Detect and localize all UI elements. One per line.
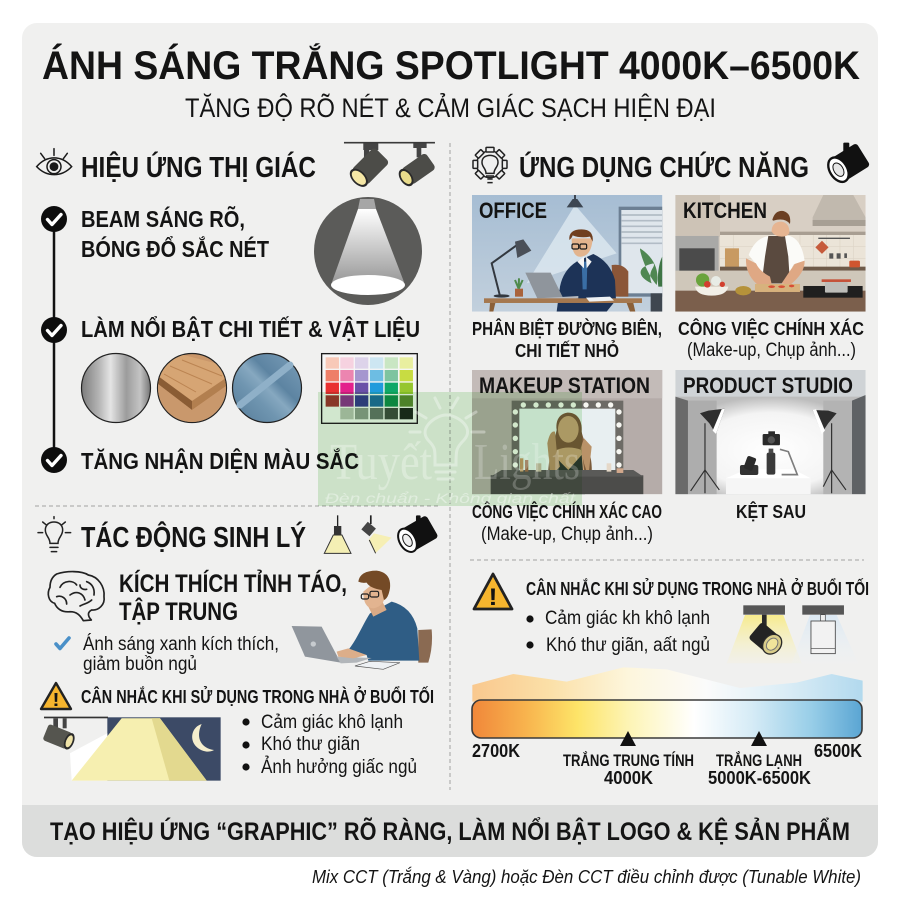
text: beam sáng rõ: BEAM SÁNG RÕ, — [81, 205, 245, 232]
material: wood — [158, 354, 226, 424]
title: ÁNH SÁNG TRẮNG SPOTLIGHT 4000K–6500K — [42, 42, 860, 88]
image: makeup station — [472, 370, 662, 494]
caption: kitchen — [678, 318, 864, 361]
warning mark right: ! — [488, 584, 498, 611]
decorative wave — [472, 667, 863, 702]
label: product studio: PRODUCT STUDIO — [683, 373, 853, 398]
panel: hiệu ứng thị giác — [37, 143, 436, 474]
color temperature bar — [472, 700, 862, 738]
illustration: person at laptop — [292, 571, 432, 669]
check 3 — [41, 447, 67, 473]
text: kích thích tỉnh táo: KÍCH THÍCH TỈNH TÁO, — [119, 568, 347, 598]
caption: kitchen: CÔNG VIỆC CHÍNH XÁC — [678, 318, 864, 339]
panel: cân nhắc right and color scale — [472, 574, 869, 788]
text: ánh sáng xanh — [83, 634, 279, 675]
material: brushed metal — [82, 354, 150, 422]
icon: warm track light — [727, 605, 802, 663]
label: office: OFFICE — [479, 198, 547, 223]
heading: ứng dụng chức năng: ỨNG DỤNG CHỨC NĂNG — [519, 150, 809, 184]
label: 6500K: 6500K — [814, 741, 862, 761]
heading: cân nhắc left: CÂN NHẮC KHI SỬ DỤNG TRONG NHÀ Ở BUỔI TỐI — [81, 686, 434, 707]
heading: tác động sinh lý: TÁC ĐỘNG SINH LÝ — [81, 520, 306, 554]
text: tăng nhận diện màu sắc: TĂNG NHẬN DIỆN MÀU SẮC — [81, 447, 359, 474]
icon: black spotlight — [824, 143, 870, 186]
text: kích thích tỉnh táo — [119, 568, 347, 626]
label: kitchen: KITCHEN — [683, 198, 767, 223]
text: ánh sáng xanh: Ánh sáng xanh kích thích, — [83, 634, 279, 655]
image: office — [472, 195, 662, 312]
marker: 4000K — [620, 731, 636, 746]
icon: warning triangle right — [474, 574, 512, 609]
label: 2700K: 2700K — [472, 741, 520, 761]
label: cool white: 5000K-6500K — [708, 768, 811, 788]
icon: track spotlights — [344, 143, 436, 190]
text: beam sáng rõ: BÓNG ĐỔ SẮC NÉT — [81, 235, 270, 262]
icon: beam circle — [314, 197, 422, 305]
text: beam sáng rõ — [81, 205, 270, 262]
icon: eye — [37, 149, 72, 175]
check 2 — [41, 317, 67, 343]
caption: makeup station — [472, 501, 662, 545]
label: neutral white — [563, 751, 694, 788]
caption: product studio: KỆT SAU — [736, 501, 806, 522]
panel: tác động sinh lý — [38, 515, 439, 781]
label: makeup station: MAKEUP STATION — [479, 373, 650, 398]
list: right warning — [526, 608, 710, 656]
watermark — [318, 392, 582, 506]
icon: warning triangle — [41, 683, 71, 709]
icon: gear bulb — [473, 147, 507, 183]
image: product studio — [675, 370, 866, 494]
text: làm nổi bật: LÀM NỔI BẬT CHI TIẾT & VẬT LIỆU — [81, 315, 420, 342]
text: ánh sáng xanh: giảm buồn ngủ — [83, 654, 197, 675]
list: right warning: Khó thư giãn, aất ngủ — [546, 635, 710, 656]
icon: blue check — [56, 638, 69, 648]
footnote: Mix CCT (Trắng & Vàng) hoặc Đèn CCT điều chỉnh được (Tunable White) — [312, 866, 861, 887]
check 1 — [41, 206, 67, 232]
color palette — [322, 354, 417, 423]
watermark: Tuyết — [330, 434, 432, 491]
illustration: night room with spotlight — [42, 717, 221, 781]
icon: brain — [48, 572, 104, 621]
watermark: Lights — [474, 434, 580, 491]
caption: makeup station: (Make-up, Chụp ảnh...) — [481, 524, 653, 545]
list: right warning: Cảm giác kh khô lạnh — [545, 608, 710, 629]
subtitle: TĂNG ĐỘ RÕ NÉT & CẢM GIÁC SẠCH HIỆN ĐẠI — [185, 91, 716, 123]
bottom banner — [22, 805, 878, 857]
label: cool white — [708, 751, 811, 788]
timeline line — [53, 219, 55, 460]
icons: lamps — [324, 515, 439, 555]
caption: office — [472, 318, 662, 361]
icon: bulb — [38, 517, 71, 552]
icon: cool track light — [792, 605, 858, 663]
list: left warning — [242, 712, 417, 778]
caption: kitchen: (Make-up, Chụp ảnh...) — [687, 340, 856, 361]
caption: office: CHI TIẾT NHỎ — [515, 340, 619, 361]
marker: 5000K — [751, 731, 767, 746]
caption: office: PHÂN BIỆT ĐƯỜNG BIÊN, — [472, 318, 662, 339]
material: denim — [232, 354, 302, 422]
label: cool white: TRẮNG LẠNH — [716, 751, 802, 770]
list: left warning: Cảm giác khô lạnh — [261, 712, 403, 733]
heading: hiệu ứng thị giác: HIỆU ỨNG THỊ GIÁC — [81, 150, 316, 184]
panel: ứng dụng chức năng — [472, 143, 870, 545]
caption: makeup station: CÔNG VIỆC CHÍNH XÁC CAO — [472, 501, 662, 522]
watermark: Đèn chuẩn - Không gian chất — [325, 490, 577, 506]
list: left warning: Khó thư giãn — [261, 734, 360, 755]
label: neutral white: TRẮNG TRUNG TÍNH — [563, 751, 694, 770]
image: kitchen — [675, 195, 866, 312]
label: neutral white: 4000K — [604, 768, 653, 788]
text: kích thích tỉnh táo: TẬP TRUNG — [119, 596, 238, 626]
list: left warning: Ảnh hưởng giấc ngủ — [261, 756, 417, 778]
warning mark: ! — [52, 690, 60, 710]
